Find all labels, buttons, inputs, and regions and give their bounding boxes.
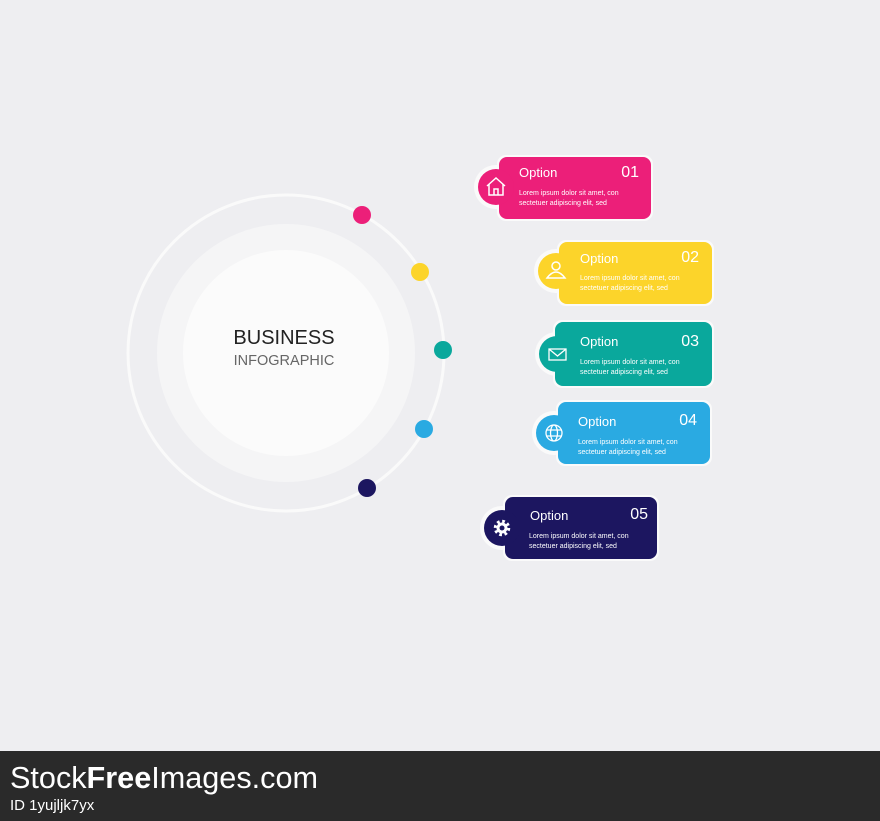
card 01: 01 <box>621 164 639 181</box>
card 05: sectetuer adipiscing elit, sed <box>529 543 617 550</box>
icon: house <box>487 178 505 195</box>
card 02 <box>534 240 714 306</box>
card 03: 03 <box>681 333 699 350</box>
card 04: 04 <box>679 412 697 429</box>
card 04: sectetuer adipiscing elit, sed <box>578 449 666 456</box>
card 03 <box>535 320 714 388</box>
card 05: 05 <box>630 506 648 523</box>
card 05: Option <box>530 508 568 523</box>
icon: user <box>547 262 565 278</box>
icon: globe <box>546 425 562 441</box>
card 02: Option <box>580 251 618 266</box>
card 02: 02 <box>681 249 699 266</box>
footer bar <box>0 751 880 821</box>
footer bar: StockFreeImages.com <box>10 761 318 795</box>
title: BUSINESS <box>233 327 335 349</box>
title <box>233 327 335 369</box>
card 03: sectetuer adipiscing elit, sed <box>580 369 668 376</box>
card 05: Lorem ipsum dolor sit amet, con <box>529 533 629 540</box>
icon: gear <box>496 522 508 534</box>
card 02: sectetuer adipiscing elit, sed <box>580 285 668 292</box>
footer bar: ID 1yujljk7yx <box>10 797 95 814</box>
dots <box>353 206 452 497</box>
card 01: Option <box>519 165 557 180</box>
card 04 <box>532 400 712 466</box>
card 02: Lorem ipsum dolor sit amet, con <box>580 275 680 282</box>
icon: envelope <box>549 349 566 360</box>
card 04: Option <box>578 414 616 429</box>
card 01 <box>474 155 653 221</box>
card 01: sectetuer adipiscing elit, sed <box>519 200 607 207</box>
card 05 <box>480 495 659 561</box>
central circle <box>128 195 444 511</box>
title: INFOGRAPHIC <box>234 353 334 369</box>
card 01: Lorem ipsum dolor sit amet, con <box>519 190 619 197</box>
card 03: Lorem ipsum dolor sit amet, con <box>580 359 680 366</box>
card 04: Lorem ipsum dolor sit amet, con <box>578 439 678 446</box>
card 03: Option <box>580 334 618 349</box>
